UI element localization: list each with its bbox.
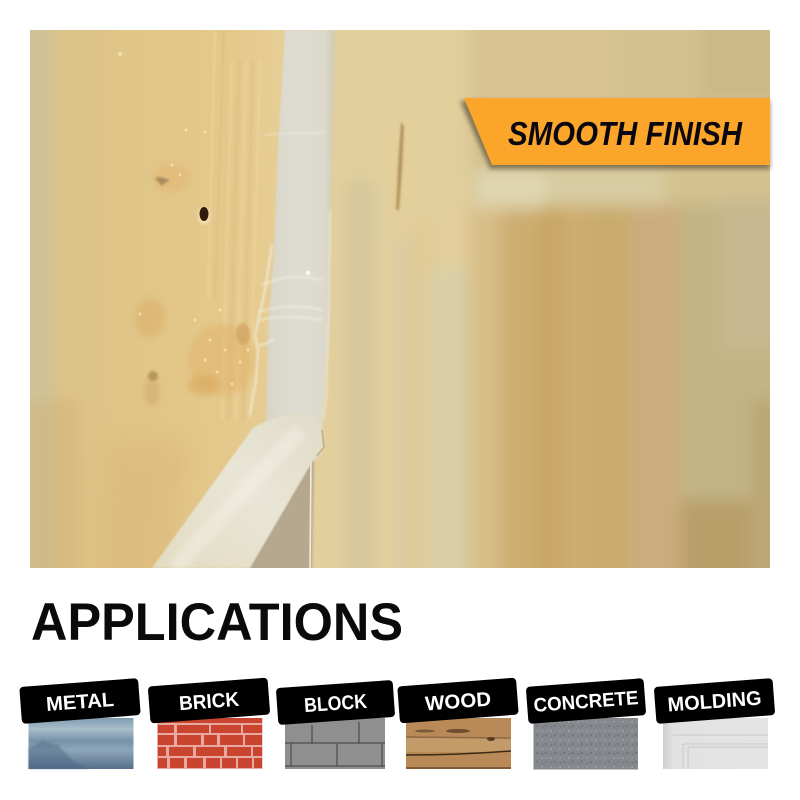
photo base <box>30 30 770 568</box>
application: metal <box>19 678 141 769</box>
sealant bead <box>250 30 335 425</box>
badge ribbon <box>464 98 770 165</box>
heading: applications: APPLICATIONS <box>31 593 403 652</box>
tag: concrete: CONCRETE <box>533 687 639 717</box>
swatch: wood <box>406 718 511 769</box>
shadowed gap under spatula <box>245 455 314 570</box>
swatch: molding <box>663 718 768 769</box>
dark grain streak <box>396 122 404 210</box>
swatch: concrete <box>534 718 638 770</box>
application: molding <box>654 678 775 769</box>
swatch: brick <box>157 718 262 769</box>
photo: sealant being smoothed on wood <box>30 30 770 568</box>
tag: metal: METAL <box>45 689 115 716</box>
wood knots and dimples <box>118 52 256 406</box>
application: wood <box>397 678 519 769</box>
badge: smooth finish <box>460 98 770 169</box>
badge shadow <box>460 101 770 169</box>
badge text: SMOOTH FINISH <box>508 115 743 152</box>
tag: molding: MOLDING <box>667 688 762 716</box>
tag: wood: WOOD <box>424 689 492 715</box>
tag: block: BLOCK <box>303 691 368 717</box>
application: concrete <box>526 678 646 770</box>
left wood panel <box>30 30 262 568</box>
spatula tool <box>152 413 325 568</box>
application: brick <box>148 678 270 769</box>
swatch: metal <box>28 718 134 769</box>
swatch: block <box>285 718 385 769</box>
application: block <box>276 680 395 769</box>
tag: brick: BRICK <box>178 689 240 715</box>
right wood panel <box>357 30 770 568</box>
